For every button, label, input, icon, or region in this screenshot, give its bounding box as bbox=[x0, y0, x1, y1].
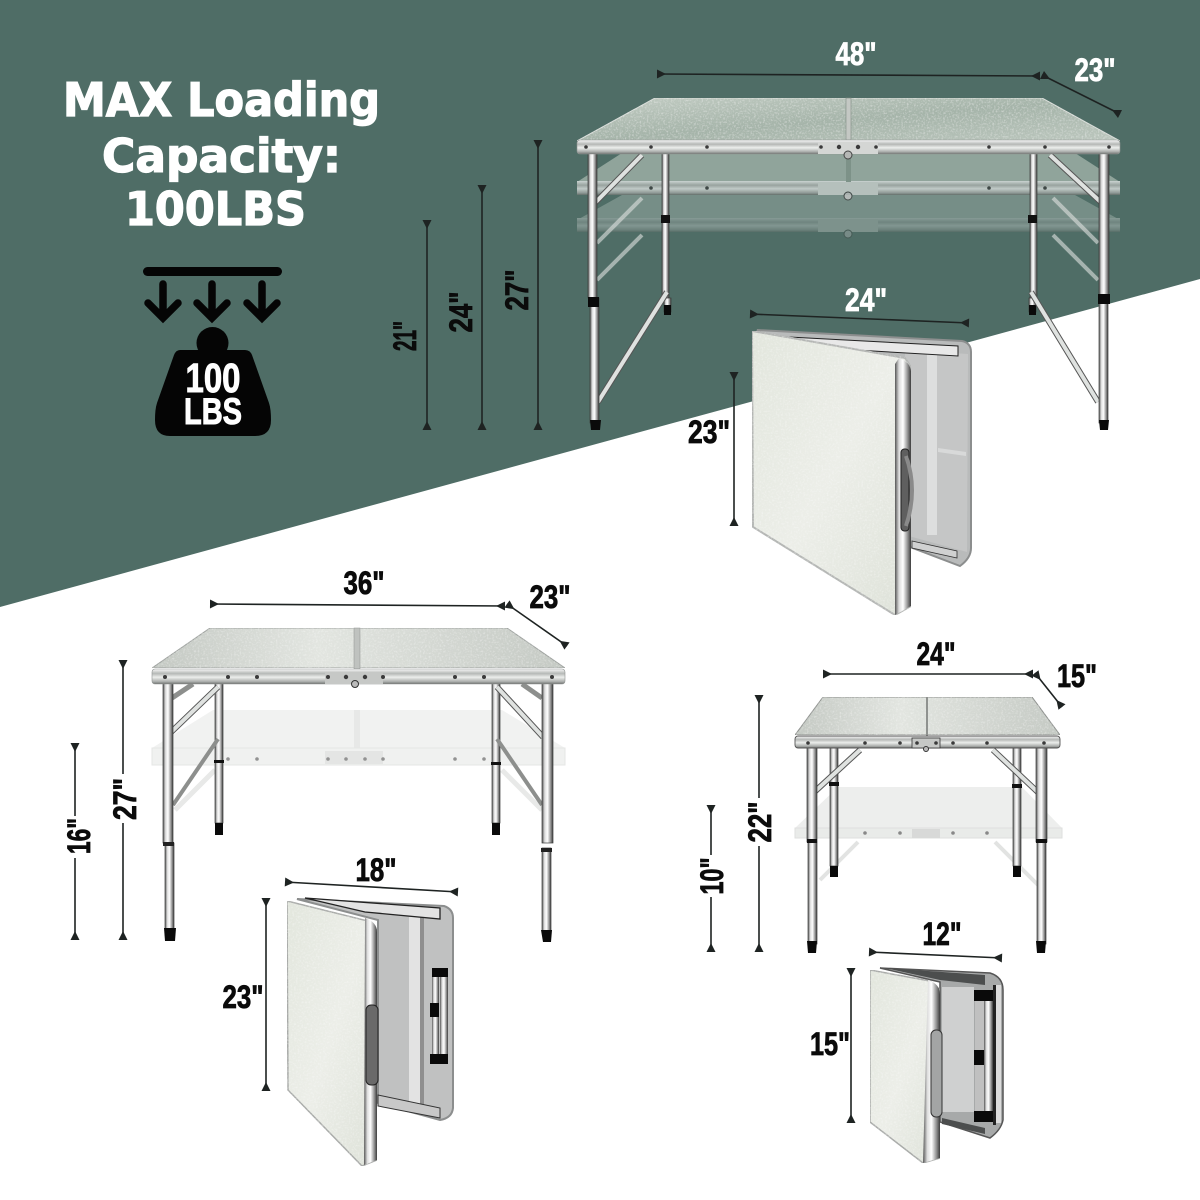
front rail bbox=[795, 736, 1060, 748]
centre seam bbox=[354, 628, 360, 669]
dimension: 15 inch depth: 15" bbox=[1057, 658, 1097, 694]
dimension: 18 inch folded width bbox=[285, 852, 458, 892]
back half bbox=[297, 899, 453, 1120]
front panel surface bbox=[287, 901, 377, 1166]
ghost level lowest bbox=[577, 195, 1120, 238]
dimension: 12 inch folded width bbox=[869, 916, 1002, 958]
dimension: folded width 24 inch bbox=[750, 282, 969, 323]
dimension: 24 inch width: 24" bbox=[916, 636, 956, 672]
back legs bbox=[661, 152, 1037, 315]
dimension: height 21 inch: 21" bbox=[387, 321, 423, 351]
edge strip bbox=[923, 980, 940, 1163]
title: MAX Loading bbox=[63, 73, 380, 127]
title: 100LBS bbox=[125, 182, 306, 236]
table top bbox=[152, 628, 565, 668]
back half bbox=[880, 968, 1003, 1138]
dimension: 23 inch folded height: 23" bbox=[222, 979, 264, 1015]
handle bbox=[901, 449, 912, 531]
folded table: 48 inch bbox=[752, 330, 971, 615]
dimension: height 27 inch: 27" bbox=[499, 270, 535, 310]
dimension: width 48 inch: 48" bbox=[836, 36, 876, 72]
front rail bbox=[152, 669, 565, 684]
front panel surface bbox=[870, 970, 940, 1163]
braces bbox=[810, 750, 1043, 797]
dimension: 36 inch table depth bbox=[507, 579, 570, 646]
braces bbox=[592, 155, 1105, 402]
dimension: 18 inch folded width: 18" bbox=[356, 852, 396, 888]
front legs bbox=[588, 152, 1110, 430]
stowed legs bbox=[430, 968, 448, 1064]
stowed legs bbox=[974, 985, 996, 1125]
dimension: 36 inch table depth: 23" bbox=[530, 579, 570, 615]
dimension: 12 inch folded width: 12" bbox=[922, 916, 962, 952]
ghost braces bbox=[597, 198, 1098, 280]
dimension: 15 inch folded height: 15" bbox=[810, 1026, 850, 1062]
dimension: 22 inch height: 22" bbox=[742, 802, 778, 842]
folded table: 24 inch bbox=[870, 968, 1003, 1163]
background: green diagonal panel bbox=[0, 0, 1200, 607]
back half open bbox=[757, 330, 971, 566]
handle bbox=[931, 1030, 942, 1117]
dimension: 36 inch table low height: 16" bbox=[61, 818, 97, 854]
ghost lower level bbox=[152, 710, 565, 810]
dimension: folded width 24 inch: 24" bbox=[845, 282, 887, 318]
table top bbox=[795, 697, 1060, 735]
hinge bbox=[806, 738, 1046, 752]
inner frame bars bbox=[770, 336, 966, 558]
dimension: 10 inch height: 10" bbox=[694, 858, 730, 894]
back legs bbox=[214, 683, 501, 835]
handle bbox=[366, 1005, 378, 1085]
inner frame bars bbox=[305, 898, 440, 1118]
centre seam bbox=[846, 98, 851, 140]
edge strip bbox=[364, 918, 377, 1165]
hinge bbox=[584, 142, 1111, 159]
top and bottom dark frame bbox=[885, 968, 1001, 1134]
front legs bbox=[163, 683, 553, 942]
braces bbox=[166, 684, 543, 805]
table: 24 inch with two heights bbox=[795, 697, 1062, 953]
icon: 100 lbs weight with arrows: LBS bbox=[184, 391, 242, 432]
edge strip bbox=[895, 358, 911, 615]
dimension: height 24 inch: 24" bbox=[443, 292, 479, 332]
inner back panel bbox=[905, 350, 968, 552]
icon: 100 lbs weight with arrows bbox=[143, 267, 282, 436]
table top bbox=[577, 98, 1120, 141]
inner back panel bbox=[942, 987, 974, 1112]
dimension: 15 inch depth bbox=[1035, 658, 1097, 707]
dimension: depth 23 inch: 23" bbox=[1074, 52, 1116, 88]
dimension: 36 inch width: 36" bbox=[344, 565, 384, 601]
centre seam bbox=[926, 697, 928, 736]
front rail bbox=[577, 140, 1120, 154]
title bbox=[63, 73, 380, 236]
dimension: 36 inch table tall height: 27" bbox=[107, 778, 143, 820]
icon: 100 lbs weight with arrows: 100 bbox=[186, 355, 240, 401]
back legs bbox=[829, 748, 1022, 877]
ghost lower level bbox=[795, 787, 1062, 885]
table: 36 inch with two heights bbox=[152, 628, 565, 942]
title: Capacity: bbox=[102, 129, 341, 183]
folded table: 36 inch bbox=[287, 898, 453, 1166]
front legs bbox=[807, 748, 1047, 953]
dimension: folded height 23 inch: 23" bbox=[688, 414, 730, 450]
ghost level middle bbox=[577, 153, 1120, 200]
table: 48 inch with three heights bbox=[577, 98, 1120, 430]
dimension: depth 23 inch bbox=[1042, 52, 1120, 114]
front panel surface bbox=[752, 331, 911, 615]
hinge bbox=[163, 672, 554, 688]
